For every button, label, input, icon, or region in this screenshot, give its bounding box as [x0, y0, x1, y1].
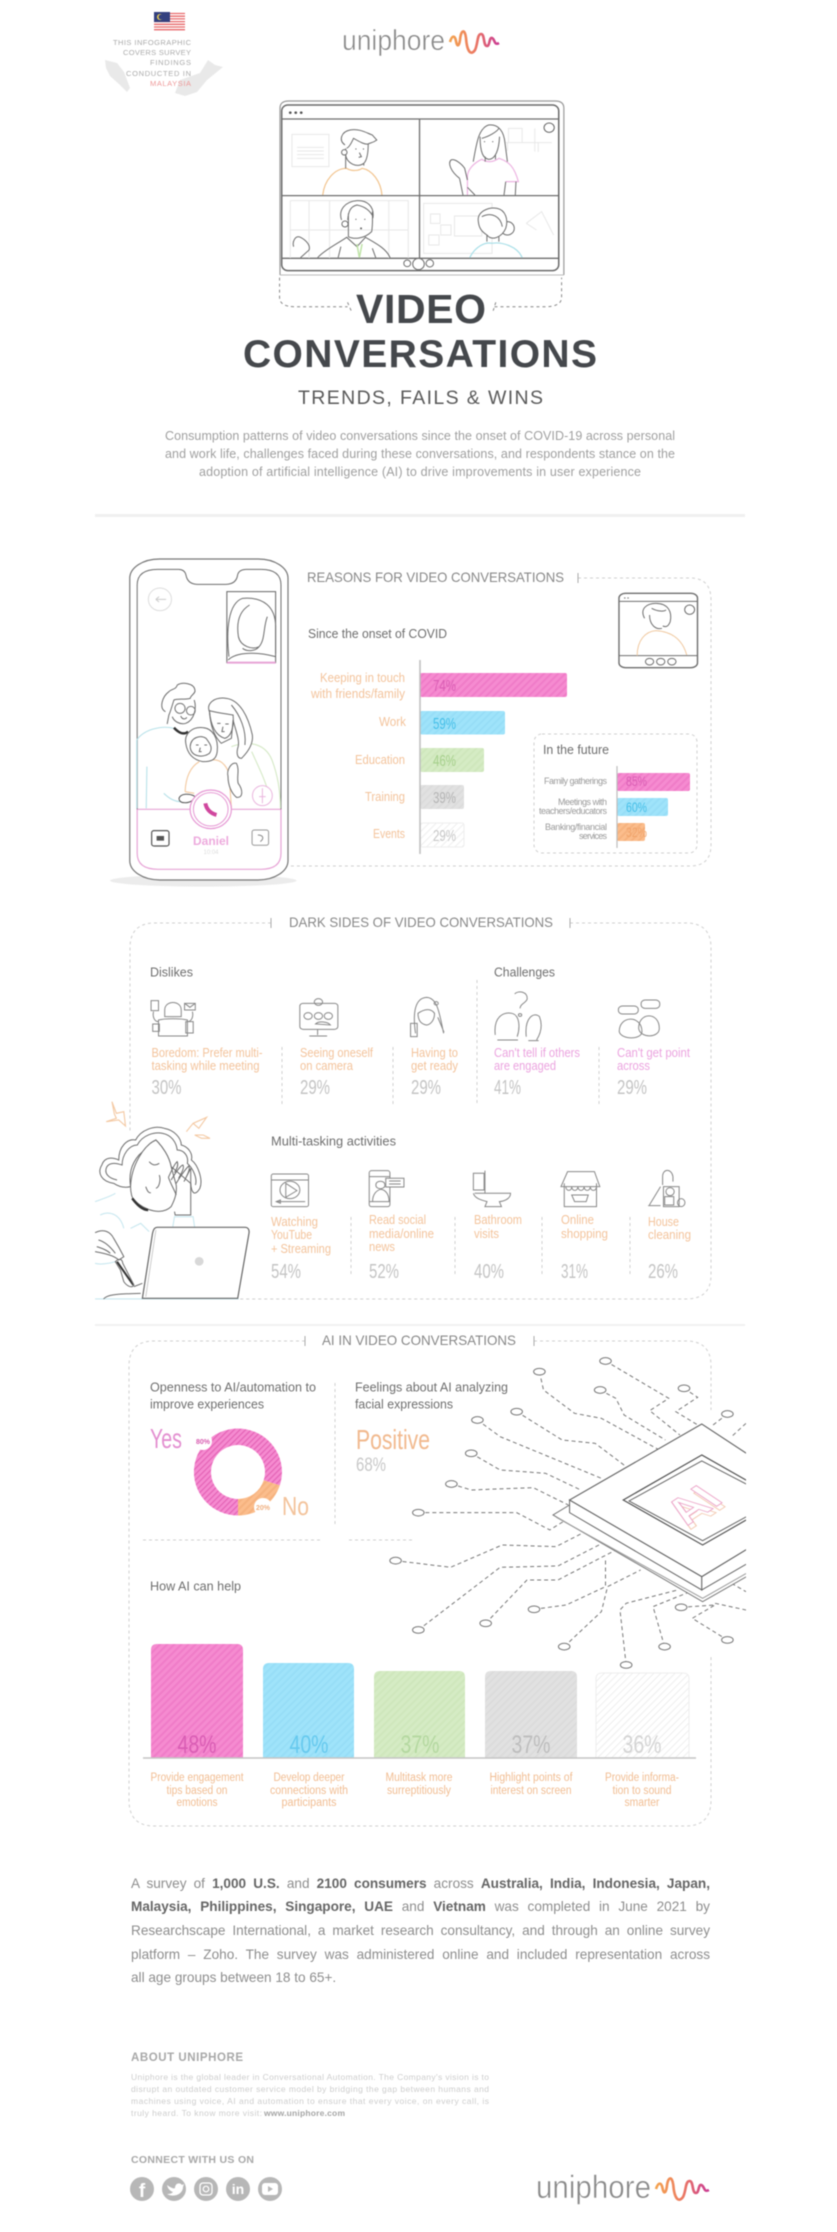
person 1 — [323, 130, 382, 195]
connect heading: CONNECT WITH US ON — [131, 2154, 254, 2166]
dislikes and challenges labels: Seeing oneself — [300, 1045, 373, 1060]
survey methodology paragraph: all age groups between 18 to 65+. — [131, 1970, 336, 1985]
bar chart: since the onset of COVID: Education — [355, 752, 405, 767]
background props — [290, 128, 554, 258]
bar chart: how AI can help: 37% — [400, 1731, 440, 1759]
intro paragraph: and work life, challenges faced during these conversations, and respondents stance on the — [165, 447, 675, 461]
dislikes and challenges labels: Having to — [411, 1045, 458, 1060]
dislikes and challenges labels: 29% — [617, 1077, 647, 1099]
feelings about AI — [355, 1380, 508, 1476]
map of Malaysia — [105, 60, 223, 96]
panel: reasons for video conversations: 10:04 — [203, 850, 219, 856]
about uniphore: Uniphore is the global leader in Conversational Automation. The Company's vision is to — [131, 2072, 489, 2082]
call button — [190, 790, 231, 829]
dislikes and challenges labels: Boredom: Prefer multi- — [152, 1045, 262, 1060]
bar chart: since the onset of COVID: Work — [379, 714, 406, 729]
survey scope note: THIS INFOGRAPHIC — [113, 38, 192, 47]
bar chart: how AI can help: connections with — [270, 1785, 348, 1797]
bar chart: how AI can help: 36% — [622, 1731, 662, 1759]
intro paragraph: adoption of artificial intelligence (AI) to drive improvements in user experience — [199, 465, 641, 479]
feelings about AI: 68% — [356, 1455, 386, 1476]
callout: in the future: teachers/educators — [539, 806, 608, 816]
dislikes and challenges labels — [152, 1045, 690, 1099]
about uniphore: www.uniphore.com — [263, 2108, 345, 2118]
intro paragraph: Consumption patterns of video conversations since the onset of COVID-19 across personal — [165, 429, 675, 443]
multi-tasking labels: 40% — [474, 1261, 504, 1283]
dislikes and challenges labels: tasking while meeting — [152, 1058, 260, 1073]
bar chart: how AI can help: interest on screen — [490, 1785, 572, 1797]
panel: reasons for video conversations — [110, 559, 711, 887]
multi-tasking labels: 26% — [648, 1261, 678, 1283]
dislikes and challenges labels: 41% — [494, 1077, 521, 1099]
bar chart: how AI can help: Develop deeper — [274, 1772, 345, 1784]
multi-tasking labels: Read social — [369, 1212, 426, 1227]
multi-tasking labels: 54% — [271, 1261, 301, 1283]
bar chart: how AI can help: Multitask more — [386, 1772, 452, 1784]
title: VIDEO — [356, 286, 486, 332]
intro paragraph — [165, 429, 675, 479]
bar chart: how AI can help: participants — [282, 1797, 337, 1809]
title: CONVERSATIONS — [243, 333, 597, 376]
subheads: Challenges — [494, 964, 555, 980]
illustration: video call window — [280, 101, 564, 275]
dislikes and challenges labels: get ready — [411, 1058, 458, 1073]
dislikes and challenges labels: Can't tell if others — [494, 1045, 580, 1060]
callout: in the future — [534, 734, 697, 853]
phone controls — [152, 786, 272, 846]
survey scope note: MALAYSIA — [150, 79, 191, 88]
heading: AI IN VIDEO CONVERSATIONS — [322, 1332, 516, 1348]
dislikes and challenges labels: 29% — [411, 1077, 441, 1099]
survey methodology paragraph — [130, 1876, 710, 1986]
multi-tasking labels: media/online — [369, 1226, 434, 1241]
feelings about AI: Positive — [356, 1424, 430, 1455]
openness question: Openness to AI/automation to — [150, 1380, 316, 1394]
feelings about AI: facial expressions — [355, 1396, 453, 1412]
subtitle: TRENDS, FAILS & WINS — [298, 387, 543, 409]
chat icon — [152, 831, 169, 846]
title — [243, 286, 597, 376]
bar chart: since the onset of COVID: Keeping in touch — [320, 670, 405, 685]
dislikes and challenges labels: on camera — [300, 1058, 354, 1073]
callout: in the future: Meetings with — [558, 797, 607, 807]
social icons: in — [232, 2181, 244, 2197]
bar chart: since the onset of COVID: 74% — [433, 678, 456, 695]
subhead: how AI can help: How AI can help — [150, 1578, 241, 1594]
picture in picture — [227, 592, 276, 663]
bar chart: since the onset of COVID: 29% — [433, 828, 456, 845]
callout: in the future: 32% — [626, 824, 647, 840]
about uniphore — [131, 2052, 489, 2118]
survey scope note: COVERS SURVEY — [123, 48, 191, 57]
donut chart: Yes — [150, 1423, 182, 1454]
dislikes and challenges labels: across — [617, 1058, 650, 1073]
social icons: f — [139, 2181, 146, 2202]
callout: in the future: Family gatherings — [544, 776, 608, 786]
multi-tasking labels: House — [648, 1214, 679, 1229]
donut chart: 80% — [196, 1437, 210, 1446]
bar chart: since the onset of COVID: 46% — [433, 753, 456, 770]
dislikes and challenges labels: Can't get point — [617, 1045, 690, 1060]
multi-tasking labels: 31% — [561, 1261, 588, 1283]
chip label: AI: AI — [656, 1482, 736, 1536]
multi-tasking labels: 52% — [369, 1261, 399, 1283]
person 3 — [293, 201, 390, 258]
multi-tasking labels — [271, 1212, 691, 1283]
multi-tasking labels: visits — [474, 1226, 499, 1241]
survey scope note: CONDUCTED IN — [126, 69, 191, 78]
bar chart: since the onset of COVID: 39% — [433, 790, 456, 807]
survey methodology paragraph: Malaysia, Philippines, Singapore, UAE and Vietnam was completed in June 2021 by — [131, 1899, 710, 1914]
logo: uniphore bottom: uniphore — [536, 2169, 651, 2205]
bar chart: how AI can help: emotions — [176, 1797, 218, 1809]
dislikes and challenges labels: are engaged — [494, 1058, 556, 1073]
logo: uniphore top: uniphore — [342, 25, 445, 57]
dashed title bracket — [280, 278, 562, 312]
illustration: AI chip with circuit traces — [388, 1356, 747, 1670]
openness question — [150, 1380, 316, 1412]
multi-tasking labels: shopping — [561, 1226, 608, 1241]
person 2 — [450, 123, 554, 195]
bar chart: how AI can help: 48% — [178, 1731, 216, 1759]
multi-tasking labels: Watching — [271, 1214, 318, 1229]
icon: small video window — [619, 593, 697, 668]
multi-tasking labels: cleaning — [648, 1227, 691, 1242]
bar chart: since the onset of COVID — [310, 660, 567, 854]
bar chart: since the onset of COVID: with friends/family — [310, 686, 405, 701]
social icons — [130, 2177, 282, 2202]
icons: dislikes and challenges — [151, 992, 660, 1041]
survey scope note: FINDINGS — [150, 58, 191, 67]
subheads — [150, 964, 555, 1148]
survey methodology paragraph: A survey of 1,000 U.S. and 2100 consumers across Australia, India, Indonesia, Japan, — [131, 1876, 710, 1891]
callout: in the future: 60% — [626, 799, 647, 815]
family — [137, 683, 280, 808]
bar chart: how AI can help: Provide informa- — [605, 1772, 679, 1784]
bar chart: how AI can help: tion to sound — [612, 1785, 672, 1797]
survey methodology paragraph: Researchscape International, a market research consultancy, and through an online survey — [131, 1923, 710, 1938]
bar chart: how AI can help: tips based on — [166, 1785, 228, 1797]
heading: DARK SIDES OF VIDEO CONVERSATIONS — [289, 914, 553, 930]
bar chart: how AI can help: Highlight points of — [490, 1772, 573, 1784]
panel: dark sides of video conversations — [95, 914, 711, 1299]
bar chart: since the onset of COVID: Events — [373, 826, 405, 841]
survey scope note — [113, 38, 192, 88]
about uniphore: machines using voice, AI and automation to ensure that every voice, on every call, is — [131, 2096, 489, 2106]
callout: in the future: services — [579, 831, 608, 841]
icons: multi-tasking activities — [271, 1170, 685, 1207]
about uniphore: truly heard. To know more visit: — [131, 2108, 262, 2118]
donut chart: 20% — [256, 1503, 270, 1512]
feelings about AI: Feelings about AI analyzing — [355, 1380, 508, 1394]
person 4 — [470, 208, 522, 258]
callout: in the future: Banking/financial — [545, 822, 607, 832]
chart heading: Since the onset of COVID — [308, 626, 447, 641]
callout: in the future: 85% — [626, 773, 647, 789]
bar chart: since the onset of COVID: 59% — [433, 716, 456, 733]
heading: REASONS FOR VIDEO CONVERSATIONS — [307, 569, 564, 585]
caller name: Daniel — [193, 834, 229, 848]
subheads: Dislikes — [150, 964, 193, 980]
call controls — [404, 258, 434, 270]
donut chart: No — [282, 1491, 309, 1521]
dislikes and challenges labels: 29% — [300, 1077, 330, 1099]
multi-tasking labels: Bathroom — [474, 1212, 522, 1227]
icon: Malaysian flag — [154, 12, 185, 31]
bar chart: how AI can help: smarter — [624, 1797, 660, 1809]
callout: in the future: In the future — [543, 742, 609, 757]
bar chart: how AI can help: 40% — [290, 1731, 328, 1759]
bar chart: how AI can help: surreptitiously — [387, 1785, 451, 1797]
multi-tasking labels: Online — [561, 1212, 594, 1227]
multi-tasking labels: news — [369, 1239, 395, 1254]
openness question: improve experiences — [150, 1396, 264, 1412]
multi-tasking labels: YouTube — [271, 1227, 312, 1242]
bar chart: how AI can help: 37% — [512, 1731, 550, 1759]
about uniphore: disrupt an outdated customer service model by bridging the gap between humans and — [131, 2084, 489, 2094]
illustration: phone call — [110, 559, 297, 887]
chip label: AI: AI — [653, 1478, 733, 1532]
subheads: Multi-tasking activities — [271, 1134, 396, 1148]
multi-tasking labels: + Streaming — [271, 1241, 331, 1256]
about uniphore: ABOUT UNIPHORE — [131, 2052, 243, 2064]
bar chart: how AI can help: Provide engagement — [150, 1772, 244, 1784]
illustration: stressed person at laptop — [95, 1102, 249, 1299]
donut chart — [150, 1423, 309, 1521]
survey methodology paragraph: platform – Zoho. The survey was administered online and included representation across — [131, 1947, 710, 1962]
bar chart: how AI can help — [143, 1644, 696, 1809]
panel: AI in video conversations — [128, 1334, 747, 1827]
dislikes and challenges labels: 30% — [152, 1077, 182, 1099]
bar chart: since the onset of COVID: Training — [365, 789, 405, 804]
